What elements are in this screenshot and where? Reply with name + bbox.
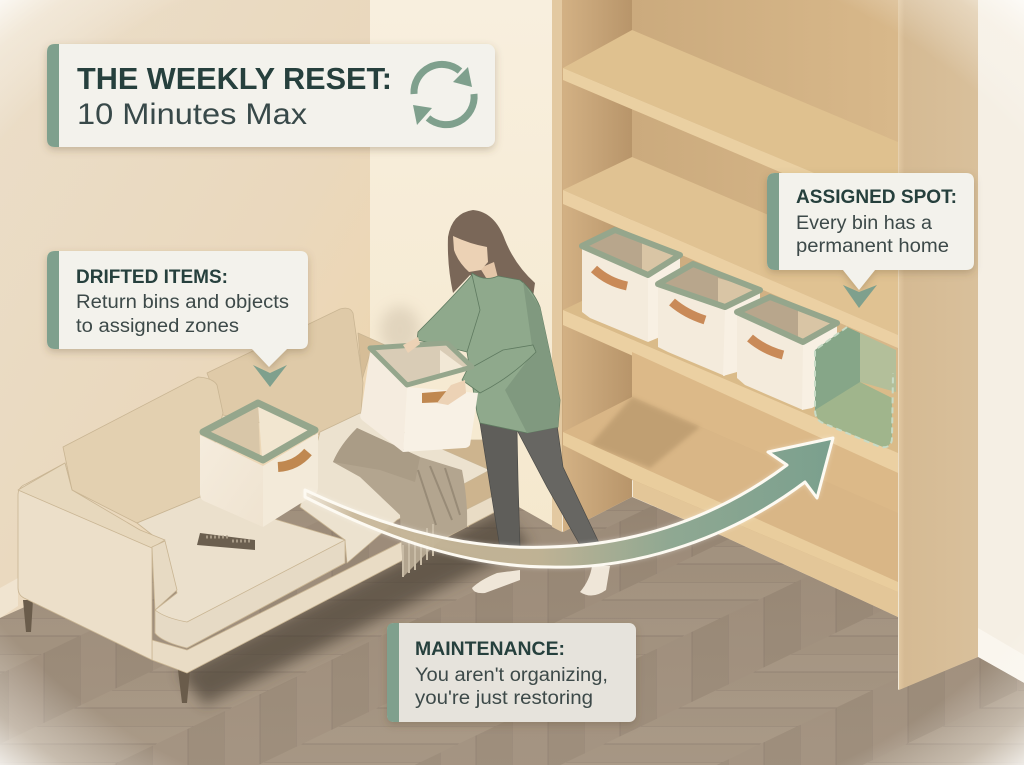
curved arrow to assigned spot (305, 438, 833, 567)
fringe (403, 524, 433, 577)
arm inner (152, 541, 177, 610)
body text: Return bins and objects (76, 292, 289, 313)
throw blanket (333, 428, 467, 577)
background: left wall (0, 0, 371, 640)
rim (203, 403, 315, 460)
drifted bin on sofa (200, 403, 318, 527)
lower back panel shading (632, 352, 898, 513)
right face (263, 433, 318, 527)
accent bar (387, 623, 399, 722)
arm right (462, 345, 536, 393)
remote control (197, 533, 255, 550)
handle (750, 338, 783, 355)
background: far right wall (975, 0, 1024, 690)
background: right wall (370, 0, 560, 560)
bin on shelf A (582, 228, 680, 342)
right face (403, 387, 478, 452)
arm top (18, 463, 165, 548)
rear leg (480, 423, 520, 548)
lower hand (437, 380, 466, 405)
sofa shadow (178, 510, 530, 705)
pointer chevron: assigned spot (843, 285, 877, 308)
sofa (18, 308, 495, 703)
pointer chevron: drifted items (253, 365, 287, 387)
heading: MAINTENANCE: (415, 639, 565, 660)
shelf 2 (563, 157, 898, 348)
face (453, 236, 488, 272)
sweater shading (505, 282, 560, 433)
body text: You aren't organizing, (415, 665, 608, 686)
bookcase kick board (633, 480, 898, 617)
handle (672, 302, 705, 320)
body text: permanent home (796, 236, 949, 257)
callout: assigned spot (767, 173, 974, 290)
accent bar (767, 173, 779, 270)
heading: ASSIGNED SPOT: (796, 187, 957, 208)
seat cushion left (137, 497, 345, 648)
bin on shelf C (737, 295, 837, 410)
baseboard right (978, 628, 1024, 683)
sofa legs (23, 600, 190, 703)
sweater torso (465, 273, 560, 433)
subtitle: 10 Minutes Max (77, 98, 307, 131)
interior right (258, 404, 315, 458)
arm outer face (18, 463, 152, 660)
body text: to assigned zones (76, 316, 239, 337)
left face (360, 352, 407, 452)
back cushion left (63, 377, 223, 523)
front leg (517, 425, 600, 545)
interior left (205, 404, 260, 458)
icon: refresh arrows (413, 64, 474, 125)
empty assigned spot highlight (815, 327, 896, 447)
seat cushion right (300, 413, 490, 563)
bin on shelf B (658, 262, 760, 376)
callout: maintenance (387, 623, 636, 722)
body text: Every bin has a (796, 213, 932, 234)
far arm end (440, 440, 493, 527)
held bin (360, 337, 478, 452)
shadow on wall behind person (380, 306, 420, 354)
shelf 4 (563, 397, 898, 592)
title heading: THE WEEKLY RESET: (77, 61, 392, 96)
bookcase left side panel (562, 0, 632, 532)
left face (200, 435, 263, 527)
accent bar (47, 251, 59, 349)
callout: drifted items (47, 251, 308, 367)
neck (480, 262, 498, 281)
shelf 1 (563, 30, 898, 222)
arrow glow (305, 438, 833, 567)
rim (370, 343, 472, 385)
herringbone floor (0, 496, 1024, 765)
seat cushion front (155, 540, 345, 648)
handle (278, 452, 308, 467)
handle (422, 391, 447, 403)
interior (370, 343, 472, 385)
bookcase right post (898, 0, 978, 690)
handle (594, 269, 627, 286)
bookcase left edge (552, 0, 562, 532)
arm left (417, 275, 480, 352)
title card (47, 44, 495, 147)
shelf 3 (563, 277, 898, 473)
heading: DRIFTED ITEMS: (76, 267, 228, 288)
bookcase back panel (552, 0, 898, 600)
accent bar (47, 44, 59, 147)
body text: you're just restoring (415, 688, 593, 709)
far arm (358, 333, 385, 380)
baseboard left (0, 578, 18, 618)
bookcase (552, 0, 978, 690)
socks (472, 570, 520, 593)
back cushion right (207, 308, 363, 435)
sofa base (152, 495, 495, 673)
person (417, 210, 610, 596)
upper hand (403, 337, 420, 353)
hair back (448, 210, 535, 297)
